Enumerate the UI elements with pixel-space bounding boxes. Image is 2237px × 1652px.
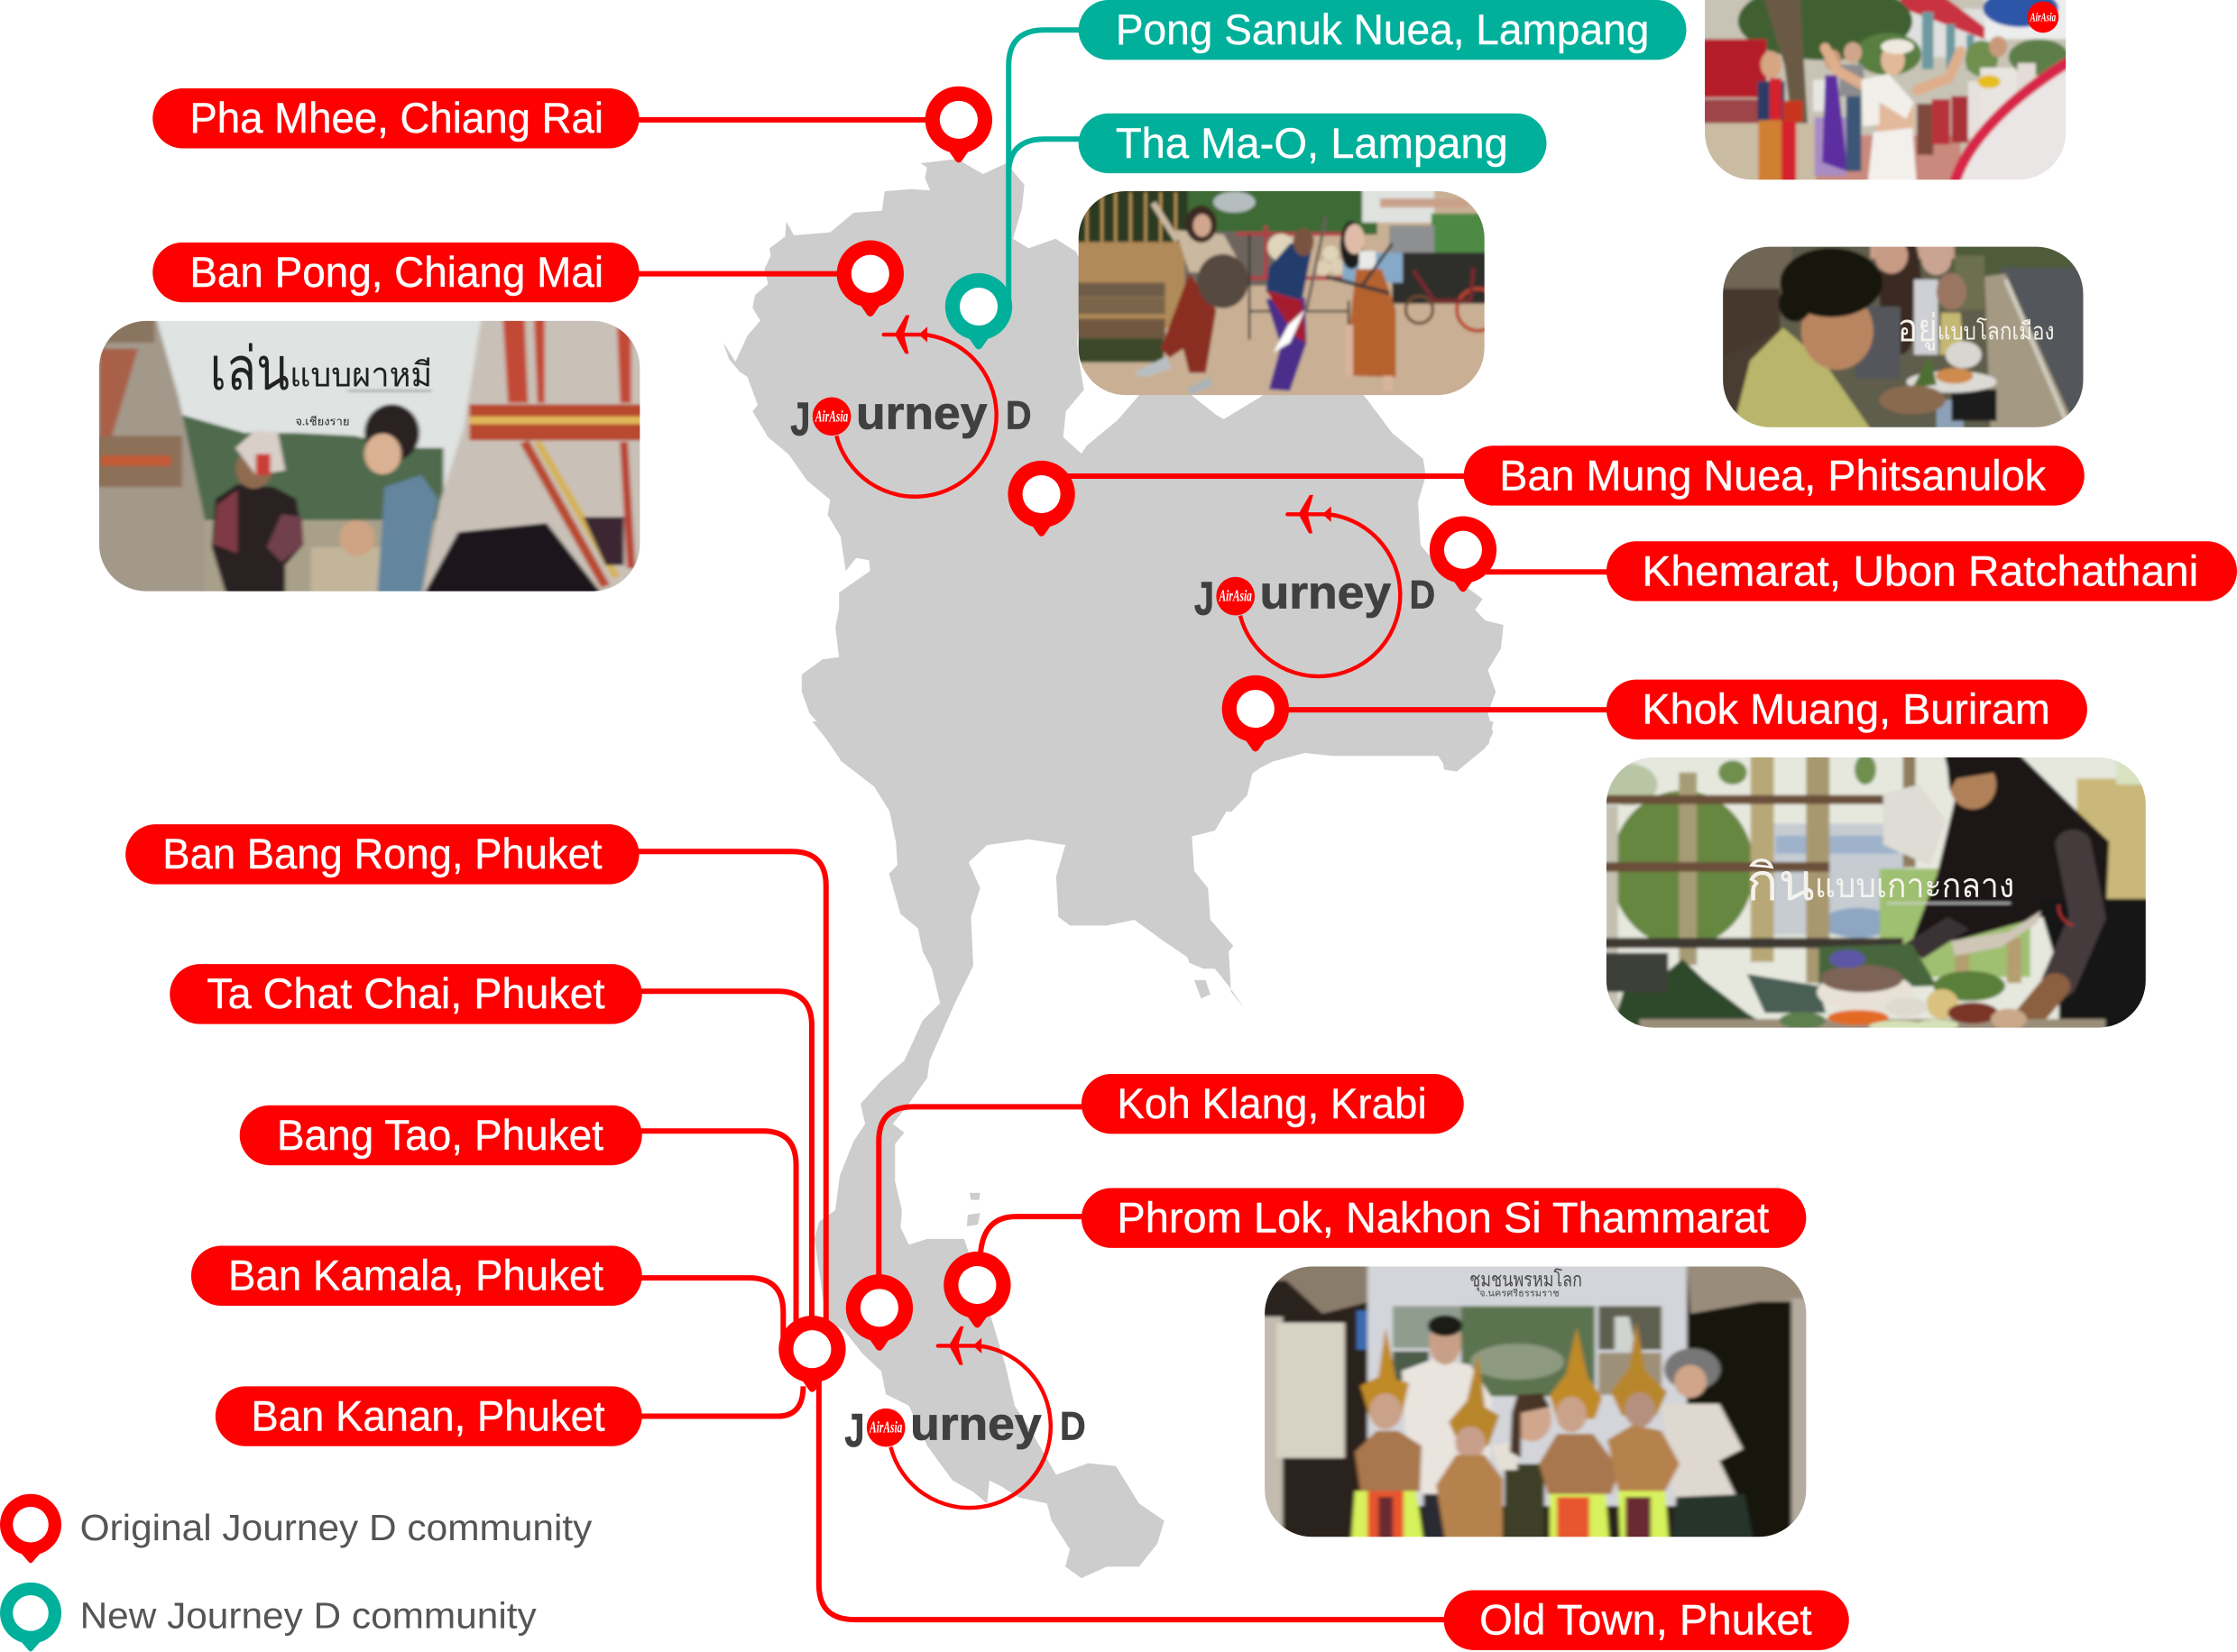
logo: Journey D, north [790, 316, 1032, 497]
label: Ban Kamala [191, 1246, 642, 1306]
legend: original community: Original Journey D community [80, 1507, 593, 1548]
photo caption [1749, 858, 2012, 900]
photo caption: เล่น [210, 337, 290, 403]
label: Ban Kanan [216, 1386, 642, 1446]
logo: Journey D, north-east: urney [1260, 567, 1391, 619]
photo: Khok Muang, Buriram [1593, 751, 2159, 1037]
label: Ta Chat Chai [170, 964, 642, 1024]
label: Phrom Lok: Phrom Lok, Nakhon Si Thammarat [1117, 1195, 1769, 1243]
label: Koh Klang [1082, 1074, 1464, 1133]
label: Khemarat: Khemarat, Ubon Ratchathani [1642, 547, 2198, 595]
pin: Ban Pong [837, 241, 904, 317]
logo: Journey D, south: AirAsia [869, 1419, 903, 1436]
logo: Journey D, south: urney [910, 1399, 1042, 1450]
photo: Pong Sanuk Nuea, Lampang [1698, 0, 2072, 189]
label: Tha Ma-O: Tha Ma-O, Lampang [1116, 120, 1508, 168]
label: Ta Chat Chai: Ta Chat Chai, Phuket [207, 970, 605, 1018]
logo: Journey D, south: D [1060, 1405, 1086, 1449]
logo: Journey D, north: J [790, 393, 810, 445]
connector lines [628, 30, 1626, 1620]
logo: Journey D, north: D [1006, 393, 1032, 437]
photo caption: ชุมชนพรหมโลก [1469, 1269, 1582, 1292]
label: Ban Kanan: Ban Kanan, Phuket [251, 1392, 605, 1440]
pin: Khok Muang [1222, 675, 1289, 752]
label: Khok Muang [1606, 680, 2087, 739]
legend: new community: New Journey D community [80, 1594, 538, 1636]
label: Old Town: Old Town, Phuket [1479, 1597, 1812, 1645]
label: Khok Muang: Khok Muang, Buriram [1642, 686, 2050, 734]
logo: Journey D, north-east: AirAsia [1219, 588, 1252, 605]
photo caption: จ.นครศรีธรรมราช [1479, 1289, 1560, 1299]
photo caption [1900, 312, 2053, 350]
label: Pong Sanuk Nuea: Pong Sanuk Nuea, Lampang [1116, 6, 1649, 54]
label: Ban Mung Nuea: Ban Mung Nuea, Phitsanulok [1499, 452, 2046, 500]
label: Ban Kamala: Ban Kamala, Phuket [228, 1253, 603, 1300]
children in costume [1351, 1321, 1680, 1540]
AirAsia badge [2027, 2, 2058, 32]
label: Ban Pong: Ban Pong, Chiang Mai [189, 249, 603, 297]
label: Khemarat [1606, 541, 2237, 601]
pin: Pha Mhee [925, 87, 992, 162]
photo caption [1469, 1269, 1582, 1299]
photo: Ban Mung Nuea, Phitsanulok [1723, 247, 2084, 427]
photo: Tha Ma-O, Lampang [1079, 191, 1485, 395]
legend: new community [0, 1583, 538, 1652]
label: Old Town [1444, 1591, 1849, 1650]
map of Thailand [723, 159, 1504, 1578]
logo: Journey D, north: urney [856, 387, 987, 438]
logo: Journey D, north: AirAsia [815, 408, 848, 425]
legend [0, 1494, 593, 1652]
photo: Pha Mhee, Chiang Rai [90, 313, 649, 598]
label: Bang Tao: Bang Tao, Phuket [277, 1112, 603, 1160]
photo caption [213, 343, 429, 426]
logo: Journey D, north-east: J [1194, 574, 1214, 626]
logo: Journey D, south: J [844, 1405, 864, 1457]
label: Pha Mhee: Pha Mhee, Chiang Rai [189, 95, 603, 142]
label: Bang Tao [240, 1106, 642, 1165]
pin: Phrom Lok [944, 1252, 1011, 1327]
photo caption: กิน [1746, 855, 1815, 912]
photo caption: แบบโลกเมือง [1938, 317, 2055, 344]
pin: Khemarat [1430, 517, 1496, 592]
pin: Koh Klang [846, 1274, 913, 1351]
AirAsia badge: AirAsia [2030, 11, 2056, 24]
logo: Journey D, north-east: D [1410, 574, 1435, 618]
label: Tha Ma-O [1079, 114, 1546, 173]
logo: Journey D, north-east [1194, 495, 1435, 676]
photo caption: แบบผาหมี [290, 357, 432, 395]
pin: Ban Mung Nuea [1008, 461, 1075, 537]
photo caption: อยู่ [1898, 307, 1938, 351]
photo: Phrom Lok, Nakhon Si Thammarat [1265, 1266, 1806, 1537]
photo caption: แบบเกาะกลาง [1815, 867, 2014, 905]
pin: Phuket [778, 1316, 846, 1392]
label: Ban Bang Rong: Ban Bang Rong, Phuket [162, 831, 602, 878]
pin: Pong Sanuk and Tha Ma-O (new community) [945, 273, 1012, 349]
photo caption: จ.เชียงราย [295, 415, 350, 427]
logo: Journey D, south [844, 1326, 1086, 1508]
legend: original community [0, 1494, 593, 1563]
label: Koh Klang: Koh Klang, Krabi [1117, 1080, 1427, 1128]
